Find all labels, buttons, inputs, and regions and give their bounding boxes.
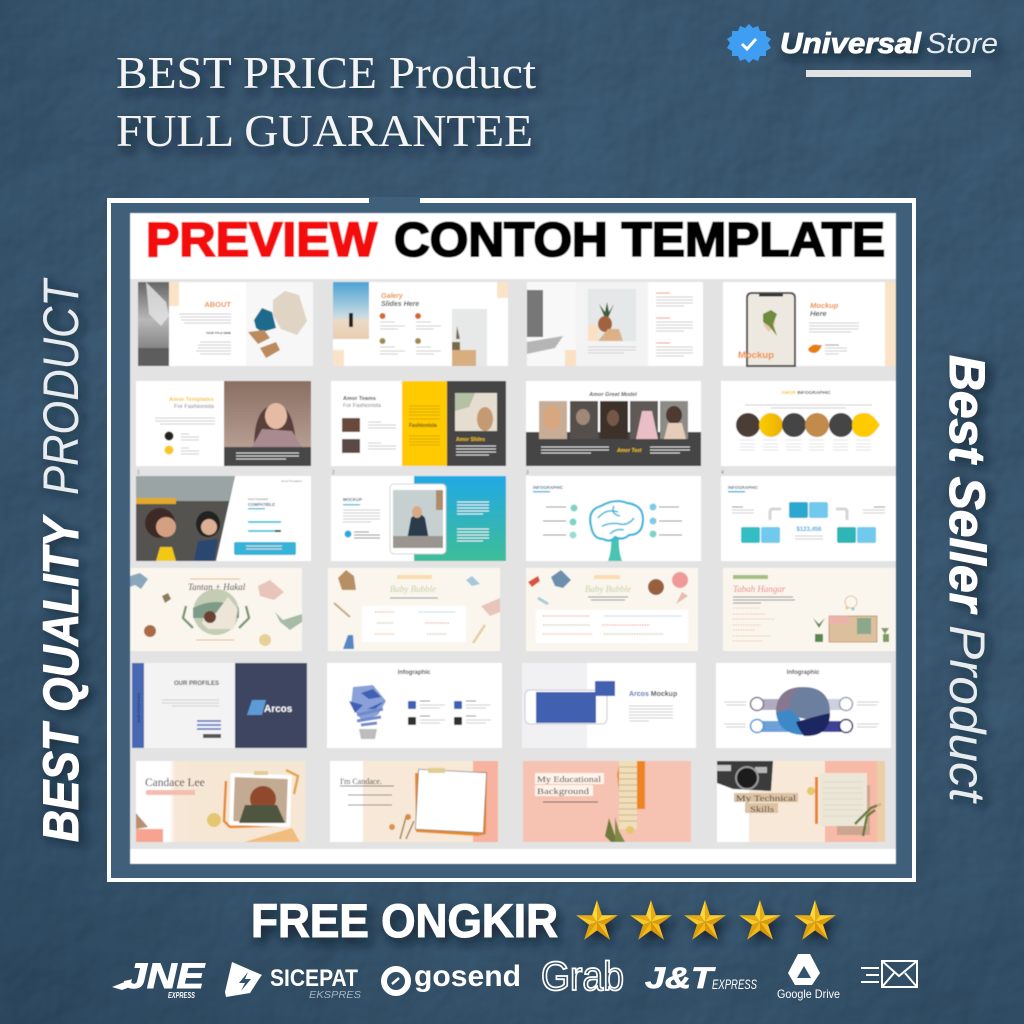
slide: amor great model: Amor Great Model bbox=[588, 392, 637, 398]
slide: amor teams: Amor Teams bbox=[343, 396, 376, 402]
slide: baby bubble list bbox=[328, 568, 500, 651]
slide: tabah hangar bbox=[723, 568, 896, 651]
slide: mockup phone: Here bbox=[810, 309, 827, 318]
slide: candace lee: Candace Lee bbox=[145, 777, 205, 789]
slide: candace lee bbox=[136, 761, 305, 842]
logo: JNE: JNE bbox=[124, 957, 206, 996]
underline bar bbox=[806, 70, 971, 77]
slide: amor templates: For Fashionista bbox=[174, 404, 215, 410]
store name: Store bbox=[926, 28, 998, 60]
slide: amor templates: Amor Templates bbox=[169, 397, 214, 403]
slide: my technical skills: Skills bbox=[750, 804, 774, 814]
logo: SiCepat: SICEPAT bbox=[270, 965, 358, 992]
logo: Grab: Grab bbox=[541, 953, 624, 999]
slide: my educational background bbox=[523, 761, 691, 842]
slide: amor great model bbox=[526, 381, 701, 466]
slide: infographic bulb: Infographic bbox=[398, 670, 431, 676]
logo: gosend: gosend bbox=[414, 960, 521, 993]
slide: galery: Slides Here bbox=[381, 301, 419, 308]
logo: Google Drive: Google Drive bbox=[777, 987, 840, 1001]
vertical label: best quality product: PRODUCT bbox=[33, 277, 89, 495]
slide: baby bubble translation bbox=[526, 568, 698, 651]
slide: infographic sphere: Infographic bbox=[787, 670, 820, 676]
logo: J&T Express: J&T bbox=[645, 962, 716, 995]
slide: infographic price: $123,456 bbox=[796, 527, 822, 533]
slide number row: 1 bbox=[137, 470, 140, 476]
slide: about: YOUR TITLE HERE bbox=[206, 331, 231, 335]
vertical label: best seller product: Best Seller bbox=[939, 355, 995, 615]
logo: Universal Store bbox=[727, 24, 998, 77]
slide: our profiles: Arcos bbox=[264, 704, 293, 715]
slide: my technical skills bbox=[717, 761, 885, 842]
slide: infographic price bbox=[721, 476, 896, 561]
logo: Google Drive bbox=[777, 954, 840, 1001]
free ongkir text: FREE ONGKIR bbox=[251, 894, 558, 947]
slide: i'm candace bbox=[330, 761, 498, 842]
slide: amor infographic: AMOR INFOGRAPHIC bbox=[781, 390, 831, 396]
vertical label: best seller product bbox=[939, 355, 995, 804]
slide number row: 4 bbox=[721, 470, 724, 476]
slide: compatible: Acord Corporated bbox=[248, 498, 268, 501]
slide: arcos mockup: Arcos Mockup bbox=[629, 691, 677, 698]
slide: tantan hakal: Tantan + Hakal bbox=[188, 582, 246, 592]
vertical label: best seller product: Product bbox=[939, 625, 995, 804]
logo: SiCepat bbox=[225, 962, 361, 1001]
icon: email bbox=[861, 961, 917, 987]
logo: SiCepat: EKSPRES bbox=[309, 990, 361, 1001]
panel: preview frame bbox=[107, 197, 916, 882]
slide: amor infographic bbox=[721, 381, 896, 466]
slide number row: 2 bbox=[332, 470, 335, 476]
panel: preview page bbox=[130, 213, 896, 864]
slide: about: ABOUT bbox=[204, 300, 231, 309]
heading: best price, full guarantee: BEST PRICE Product bbox=[116, 47, 536, 98]
slide: amor teams: For Fashionista bbox=[343, 403, 382, 409]
logo: J&T Express: EXPRESS bbox=[712, 976, 757, 992]
slide: my technical skills: My Technical bbox=[736, 793, 797, 803]
slide: our profiles bbox=[132, 663, 307, 748]
slide: mockup tablet bbox=[331, 476, 506, 561]
vertical label: best quality product: BEST QUALITY bbox=[33, 514, 89, 842]
slide: infographic bulb bbox=[327, 663, 502, 748]
slide: galery bbox=[333, 282, 508, 366]
slide: mockup plant bbox=[527, 282, 703, 366]
slide number row: 3 bbox=[526, 470, 529, 476]
logo: JNE bbox=[112, 957, 206, 1000]
slide: i'm candace: I'm Candace. bbox=[340, 777, 382, 786]
title: preview contoh template: CONTOH TEMPLATE bbox=[394, 214, 885, 267]
slide: amor great model: Amor Text bbox=[616, 448, 642, 454]
slide: our profiles: OUR PROFILES bbox=[136, 693, 141, 723]
slide: amor templates bbox=[136, 381, 311, 466]
heading: best price, full guarantee bbox=[116, 47, 536, 156]
icon: rating stars bbox=[576, 900, 836, 940]
vertical label: best quality product bbox=[33, 277, 89, 842]
slide: arcos mockup bbox=[522, 663, 696, 748]
icon: verified badge bbox=[727, 24, 771, 63]
slide: tantan hakal bbox=[130, 568, 302, 651]
logo row: couriers and delivery bbox=[112, 953, 917, 1001]
slide: tabah hangar: Tabah Hangar bbox=[733, 584, 786, 594]
slide: mockup tablet: MOCKUP bbox=[343, 497, 362, 502]
store name bbox=[780, 28, 998, 60]
slide: amor teams: Amor Slides bbox=[456, 437, 485, 443]
slide: compatible bbox=[136, 476, 311, 561]
slide: my educational background: My Educational bbox=[537, 774, 602, 784]
slide: galery: Galery bbox=[381, 293, 404, 300]
slide: amor teams: Fashionista bbox=[409, 423, 437, 429]
title: preview contoh template bbox=[146, 214, 885, 267]
slide: infographic brain bbox=[526, 476, 701, 561]
slide: about bbox=[138, 282, 313, 366]
slide: mockup phone bbox=[723, 282, 896, 366]
slide number row bbox=[137, 470, 724, 476]
slide: compatible: COMPATIBLE bbox=[248, 502, 275, 507]
slide: mockup phone: Mockup bbox=[738, 350, 774, 361]
slide: infographic sphere bbox=[716, 663, 891, 748]
heading: best price, full guarantee: FULL GUARANTEE bbox=[116, 105, 533, 156]
logo: J&T Express bbox=[645, 962, 757, 995]
slide: infographic brain: INFOGRAPHIC bbox=[533, 485, 563, 490]
slide: infographic price: INFOGRAPHIC bbox=[728, 485, 758, 490]
slide: our profiles: OUR PROFILES bbox=[174, 681, 219, 687]
slide: baby bubble translation: Baby Bubble bbox=[585, 584, 631, 594]
slide: baby bubble list: Baby Bubble bbox=[390, 584, 436, 594]
slide: mockup phone: Mockup bbox=[810, 301, 839, 310]
slide: my educational background: Background bbox=[537, 786, 590, 796]
title: preview contoh template: PREVIEW bbox=[146, 214, 378, 267]
logo: JNE: EXPRESS bbox=[168, 991, 195, 1000]
store name: Universal bbox=[780, 28, 922, 60]
slide: compatible: Acord Templates bbox=[281, 479, 302, 483]
callout: free ongkir bbox=[251, 894, 836, 947]
slide: amor teams bbox=[331, 381, 506, 466]
